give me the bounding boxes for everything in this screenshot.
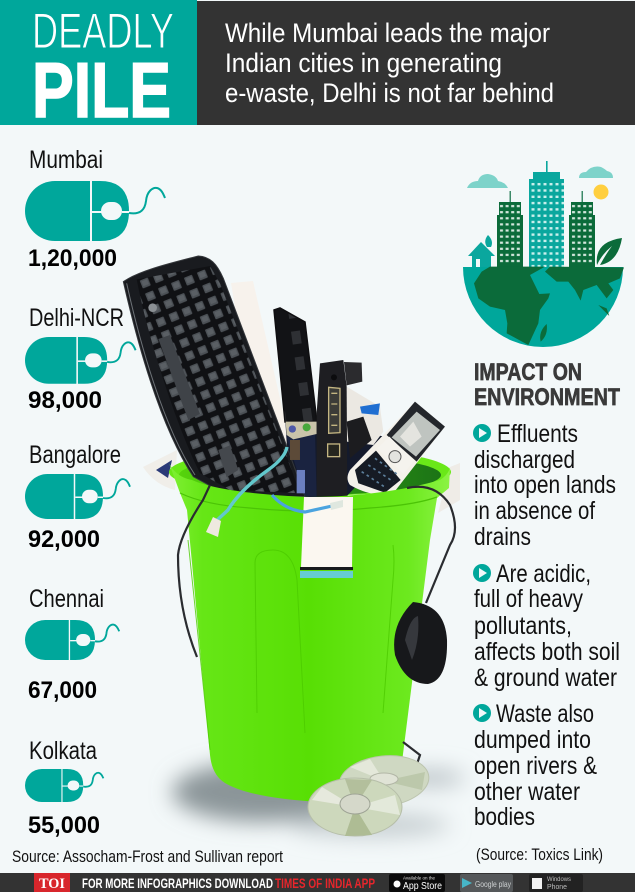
bin back rim (169, 448, 451, 496)
impact point 1: drains (474, 523, 531, 551)
source left: Source: Assocham-Frost and Sullivan report (12, 847, 283, 866)
right tower (569, 191, 595, 267)
clouds (467, 167, 613, 188)
impact point 2: pollutants, (474, 612, 572, 640)
sun (594, 184, 608, 200)
city: Kolkata (25, 737, 103, 839)
source right: (Source: Toxics Link) (476, 845, 603, 864)
title panel: DEADLY (32, 3, 174, 59)
small keyboard (274, 308, 317, 422)
back disc (337, 751, 431, 811)
city: Kolkata: 55,000 (28, 812, 100, 839)
impact heading (474, 359, 620, 411)
Windows Phone badge: Phone (547, 884, 567, 891)
TOI logo: TOI (39, 876, 65, 892)
impact point 3: bodies (474, 803, 535, 831)
Google play badge: Google play (475, 879, 512, 889)
impact point 1: Effluents (497, 420, 578, 448)
impact point 2 (473, 560, 620, 692)
mobile phone (347, 402, 445, 495)
bin body (169, 463, 450, 802)
icon: bullet (473, 424, 491, 442)
globe (463, 267, 623, 347)
city: Bangalore: 92,000 (28, 526, 100, 553)
icon: mouse Chennai (25, 620, 119, 660)
Google play badge (460, 874, 513, 892)
network cables (215, 447, 332, 522)
icon: mouse Bangalore (25, 474, 130, 519)
impact point 2: full of heavy (474, 585, 583, 613)
router (317, 360, 362, 497)
bin ribs (188, 540, 394, 750)
impact point 3 (473, 700, 597, 831)
impact point 2: Are acidic, (496, 560, 591, 588)
impact point 3: other water (474, 778, 580, 806)
title panel: PILE (32, 46, 171, 134)
TOI logo (34, 873, 70, 892)
subtitle panel: While Mumbai leads the major (225, 18, 550, 48)
bin rim edge (180, 493, 437, 511)
network plugs (206, 500, 343, 537)
App Store badge: App Store (403, 881, 442, 892)
city: Chennai (25, 585, 119, 704)
impact heading: IMPACT ON (474, 359, 582, 386)
city: Mumbai (25, 146, 165, 272)
city: Chennai: 67,000 (28, 677, 97, 704)
left tower (497, 191, 523, 267)
impact point 3: Waste also (496, 700, 594, 728)
icon: mouse Delhi (25, 337, 136, 384)
icon: mouse Mumbai (25, 181, 165, 241)
house (468, 235, 495, 267)
App Store badge (389, 874, 445, 892)
keyboard (123, 256, 305, 497)
subtitle panel (197, 1, 635, 125)
impact point 1: in absence of (474, 497, 595, 525)
front disc (308, 778, 402, 836)
subtitle panel: Indian cities in generating (225, 48, 502, 78)
waste bin illustration (123, 256, 460, 836)
black cables (178, 485, 455, 764)
compact discs (308, 751, 431, 836)
continents (474, 267, 624, 345)
impact point 1 (473, 420, 616, 551)
city: Kolkata: Kolkata (29, 737, 97, 765)
city: Delhi-NCR: Delhi-NCR (29, 304, 124, 332)
city: Mumbai: 1,20,000 (28, 245, 117, 272)
footer bar (0, 873, 635, 892)
city: Bangalore: Bangalore (29, 441, 121, 469)
subtitle panel: e-waste, Delhi is not far behind (225, 78, 554, 108)
impact point 3: dumped into (474, 726, 591, 754)
ribbon cable (300, 497, 353, 578)
Windows Phone badge: Windows (547, 877, 571, 883)
title panel (0, 0, 197, 134)
dark filling behind items (285, 415, 400, 498)
white device behind router (347, 387, 383, 458)
city: Delhi-NCR (25, 304, 136, 414)
city: Chennai: Chennai (29, 585, 104, 613)
footer message: FOR MORE INFOGRAPHICS DOWNLOAD (82, 875, 273, 891)
icon: bullet (473, 564, 491, 582)
App Store badge: Available on the (403, 876, 435, 880)
circuit card (286, 422, 317, 497)
icon: green city on globe (463, 161, 624, 347)
impact point 3: open rivers & (474, 752, 597, 780)
icon: mouse Kolkata (25, 769, 103, 802)
icon: bullet (473, 704, 491, 722)
header (0, 0, 635, 134)
leaf (597, 238, 622, 265)
city: Mumbai: Mumbai (29, 146, 103, 174)
back paper sheets (143, 281, 460, 513)
city: Bangalore (25, 441, 130, 553)
computer mouse (394, 602, 447, 684)
shadow beneath bin (172, 762, 465, 837)
city: Delhi-NCR: 98,000 (28, 387, 102, 414)
centre tower (529, 161, 564, 267)
impact point 1: discharged (474, 446, 575, 474)
footer message: TIMES OF INDIA APP (275, 875, 375, 891)
Windows Phone badge (529, 874, 583, 892)
